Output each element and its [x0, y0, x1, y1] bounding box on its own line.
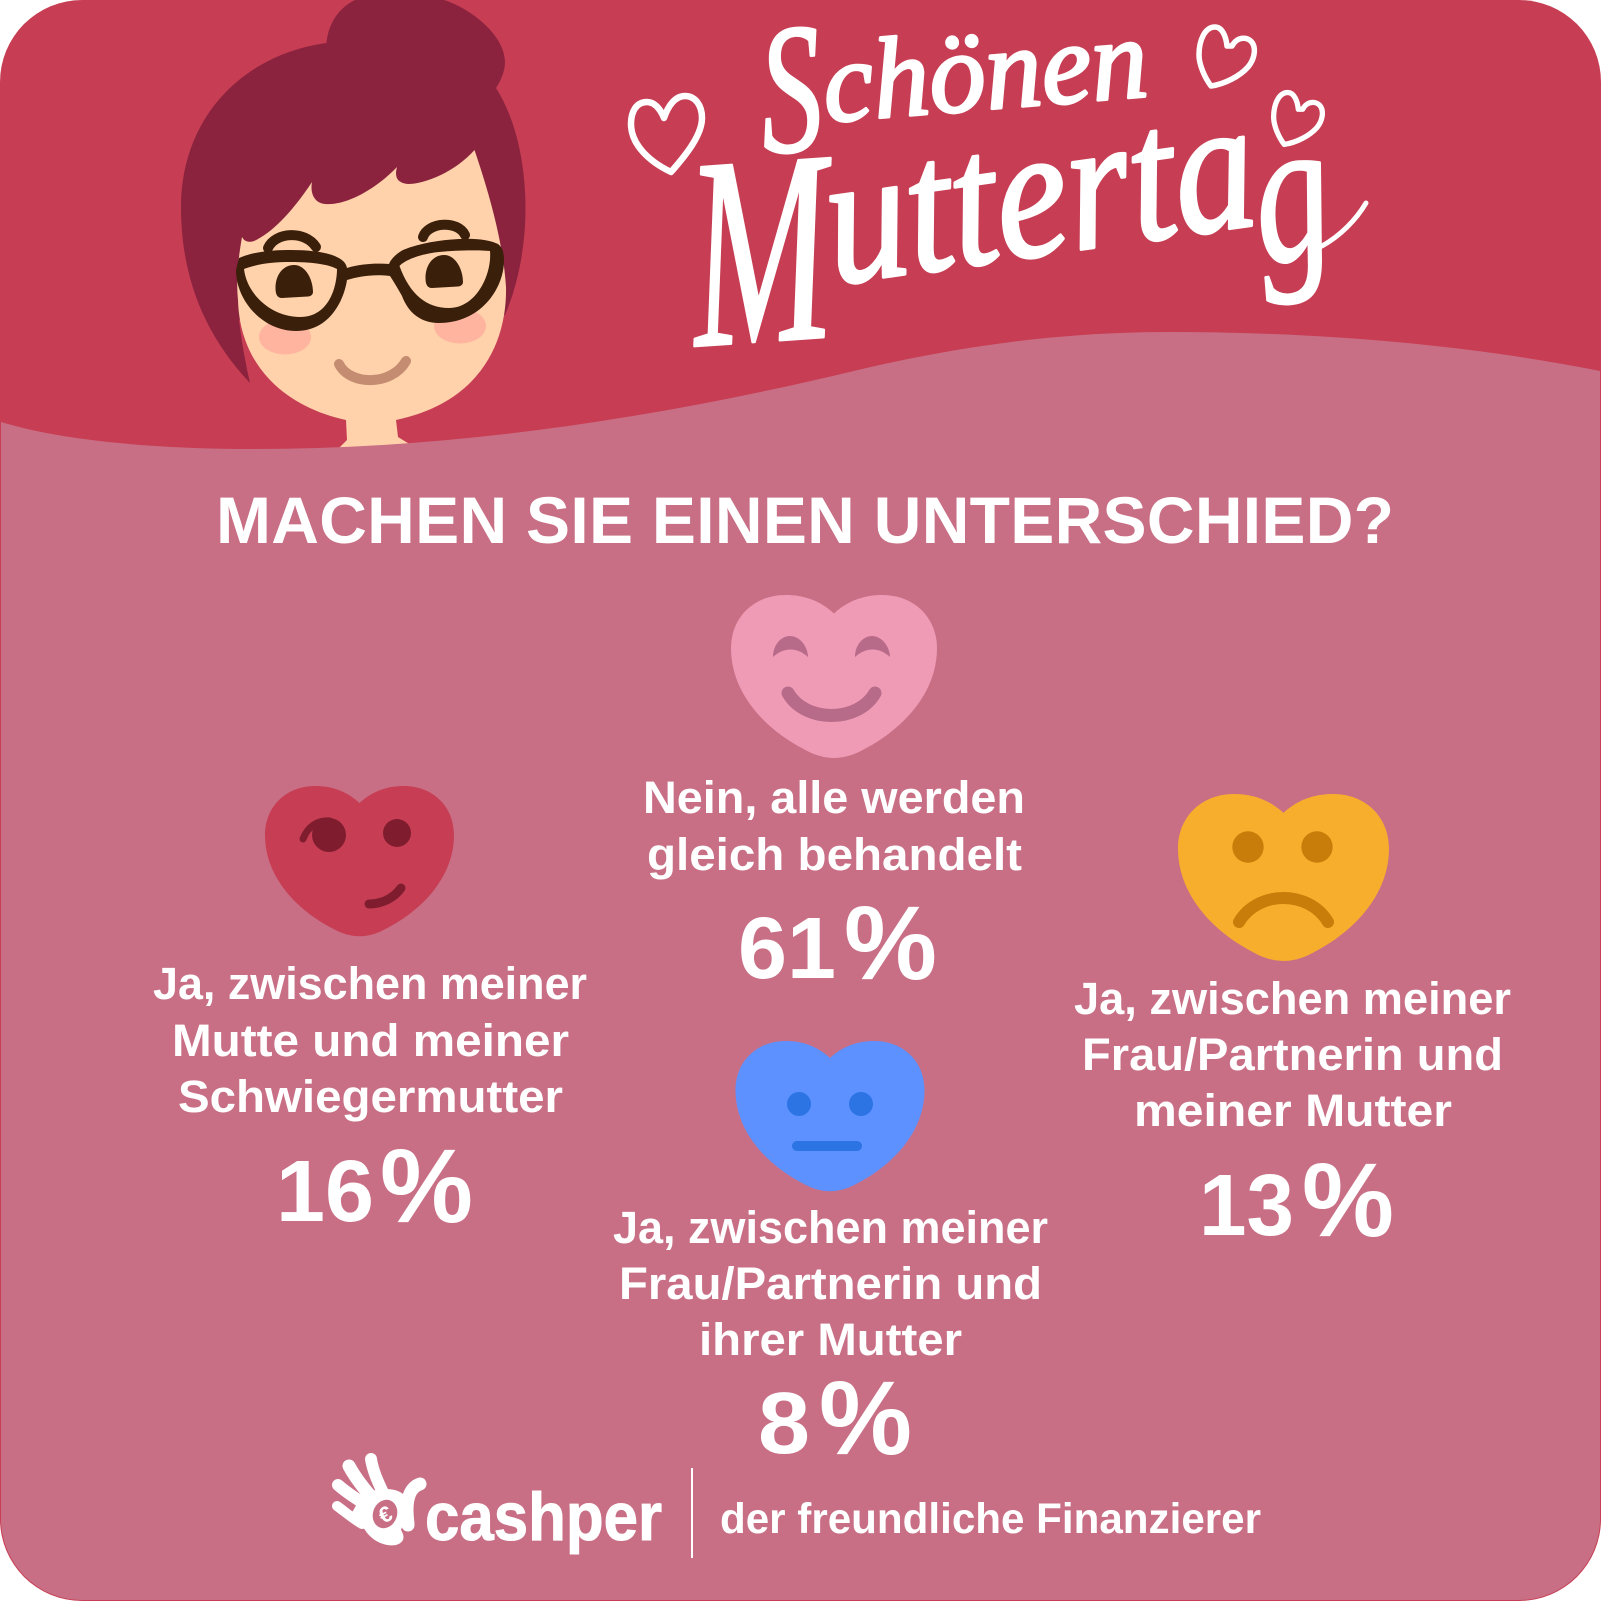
icon: orange sad heart	[1178, 794, 1389, 961]
title line two: utterta	[811, 57, 1268, 325]
label: Schwiegermutter	[178, 1071, 563, 1122]
value: 61%	[738, 885, 937, 1002]
label	[153, 958, 587, 1122]
value: 61%: %	[844, 885, 937, 1002]
heading: MACHEN SIE EINEN UNTERSCHIED?	[216, 483, 1394, 557]
value: 13%: %	[1302, 1142, 1394, 1259]
value: 13%	[1199, 1142, 1394, 1259]
value: 61%: 61	[738, 900, 836, 997]
panel: pink wave lower section	[1, 332, 1600, 1600]
icon: blue neutral heart	[736, 1041, 924, 1191]
label	[1074, 973, 1511, 1136]
hair	[181, 0, 526, 383]
label: Mutte und meiner	[172, 1015, 569, 1066]
label: Nein, alle werden	[643, 772, 1025, 823]
label: Frau/Partnerin und	[1082, 1029, 1503, 1080]
icon: red smirking heart	[265, 786, 454, 936]
illustration: woman with glasses	[181, 0, 526, 450]
icon: pink smiling heart	[731, 595, 937, 758]
face and neck	[237, 150, 506, 450]
label: ihrer Mutter	[699, 1314, 962, 1365]
label: Ja, zwischen meiner	[153, 958, 587, 1009]
icon: lower right outline heart	[1274, 93, 1322, 144]
label: Ja, zwischen meiner	[1074, 973, 1511, 1024]
label: Frau/Partnerin und	[619, 1258, 1042, 1309]
eyes	[276, 255, 463, 298]
value: 8%: 8	[758, 1375, 810, 1472]
glasses	[236, 239, 504, 331]
value: 8%: %	[819, 1360, 912, 1477]
title line two: g	[1237, 73, 1344, 309]
option: Frau/Partnerin und meine Mutter	[1074, 794, 1511, 1259]
icon: hand with euro coin	[337, 1459, 420, 1545]
icon: left outline heart	[631, 96, 702, 172]
title: Schönen Muttertag	[631, 0, 1366, 405]
value: 8%	[758, 1360, 912, 1477]
label: Ja, zwischen meiner	[613, 1202, 1048, 1253]
value: 16%: %	[380, 1128, 473, 1245]
option: Nein, alle werden gleich behandelt	[643, 595, 1025, 1002]
footer: cashper logo and slogan	[337, 1459, 1261, 1558]
icon: hand with euro coin: €	[374, 1501, 396, 1528]
eyebrows	[268, 225, 465, 248]
title line one: chönen	[818, 0, 1152, 148]
title line one	[753, 0, 1152, 194]
label	[643, 772, 1025, 880]
slogan: der freundliche Finanzierer	[720, 1495, 1261, 1543]
value: 16%: 16	[276, 1143, 374, 1240]
cheeks	[259, 308, 486, 354]
label: gleich behandelt	[647, 829, 1022, 880]
label: meiner Mutter	[1134, 1085, 1452, 1136]
mouth	[339, 361, 406, 380]
title line two: M	[676, 94, 849, 405]
value: 16%	[276, 1128, 473, 1245]
title line two	[676, 57, 1366, 405]
label	[613, 1202, 1048, 1365]
value: 13%: 13	[1199, 1157, 1294, 1254]
icon: upper right outline heart	[1199, 27, 1254, 86]
option: Frau/Partnerin und ihre Mutter	[613, 1041, 1048, 1477]
wordmark: cashper	[425, 1479, 662, 1555]
option: Mutter und Schwiegermutter	[153, 786, 587, 1245]
